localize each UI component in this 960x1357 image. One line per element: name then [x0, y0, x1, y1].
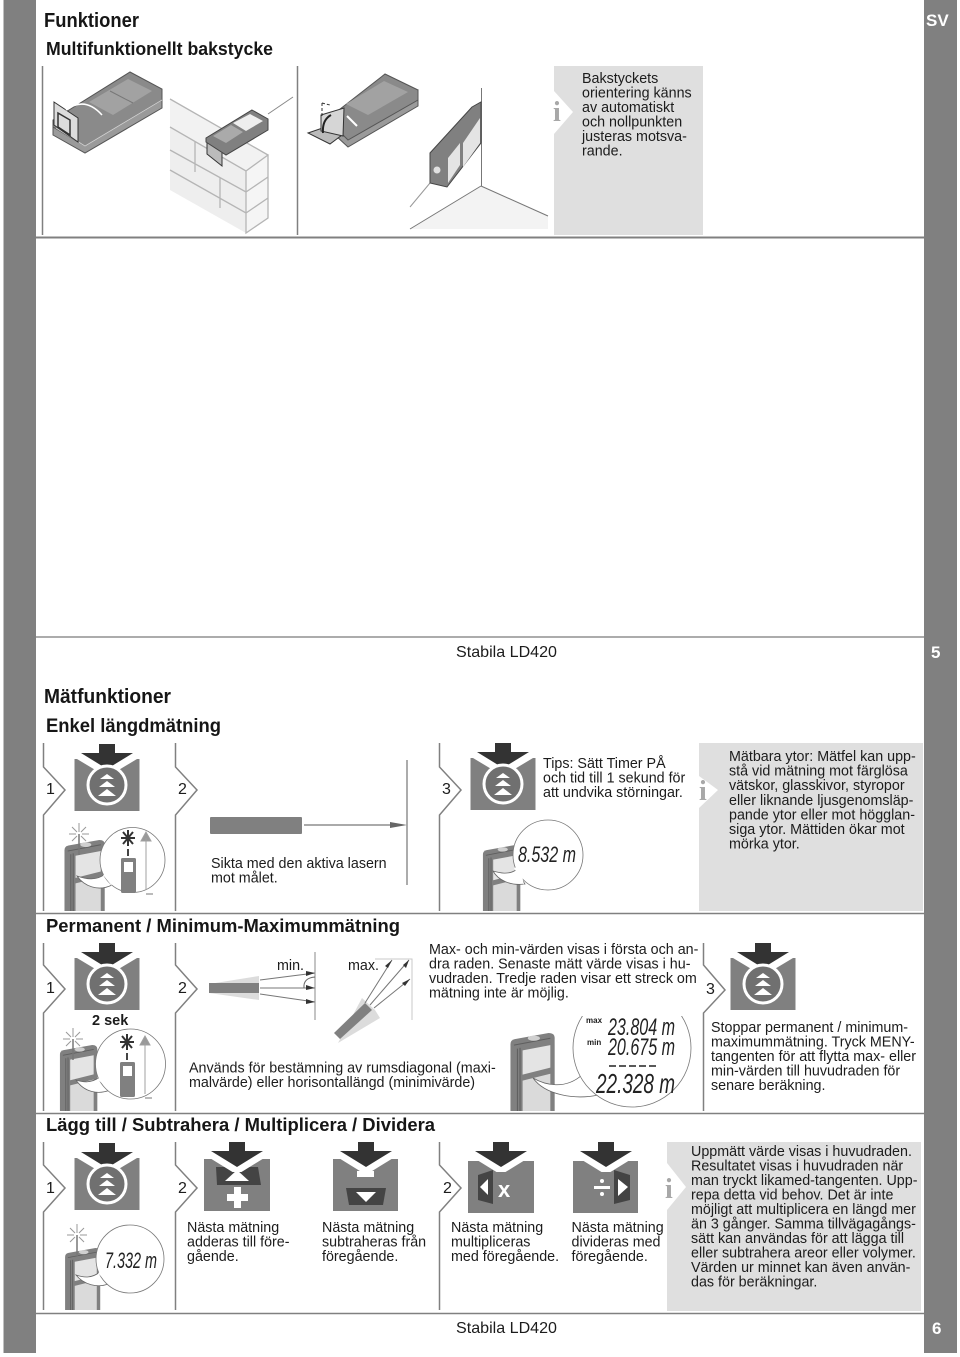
panel: add subtract multiply divide [44, 1142, 664, 1310]
text: orientation note: justeras motsva- [581, 129, 687, 145]
step tab 1 [44, 743, 65, 911]
icon: info: i [699, 776, 707, 807]
text: surfaces note: Mätbara ytor: Mätfel kan upp- [729, 749, 916, 765]
label: 2 sek: 2 sek [92, 1013, 129, 1029]
text: calculation note: sätt kan användas för att lägga till [691, 1231, 904, 1247]
language tag: SV [926, 11, 949, 30]
text: calculation note: repa detta vid behov. Det är inte [691, 1188, 893, 1204]
step number 3: 3 [442, 781, 451, 798]
panel: permanent measurement [44, 942, 916, 1111]
step tab 3 [704, 943, 725, 1111]
icon: measure button [470, 743, 536, 810]
illustration: device with flipped bracket [53, 72, 162, 153]
label: min: min [587, 1038, 601, 1047]
heading: Lägg till / Subtrahera / Multiplicera / Dividera: Lägg till / Subtrahera / Multiplicera / Dividera [46, 1114, 436, 1135]
step number 1: 1 [46, 980, 55, 997]
text: subtract: subtraheras från [322, 1234, 426, 1250]
text: surfaces note: eller liknande ljusgenomsläp- [729, 793, 914, 809]
text: stop note: senare beräkning. [711, 1078, 825, 1094]
step tab 2 multiply [440, 1142, 461, 1310]
display value: 7.332 m [105, 1248, 157, 1273]
step number 1: 1 [46, 781, 55, 798]
panel: simple length measurement [44, 743, 685, 911]
illustration: device with result [65, 1224, 164, 1310]
text: surfaces note: stå vid mätning mot färglösa [729, 764, 908, 780]
text: calculation note: Värden ur minnet kan även använ- [691, 1260, 911, 1276]
text: multiply: multipliceras [451, 1234, 530, 1250]
step number 2: 2 [178, 781, 187, 798]
text: orientation note: orientering känns [582, 86, 692, 102]
text: multiply: med föregående. [451, 1249, 559, 1265]
text: divide: divideras med [572, 1234, 661, 1250]
icon: minus button [333, 1142, 398, 1211]
icon: plus button [204, 1142, 270, 1211]
text: aim: mot målet. [211, 870, 278, 886]
multiply sign: x [498, 1177, 511, 1202]
label: min.: min. [277, 958, 304, 974]
illustration: device on brick wall [170, 97, 293, 233]
left side bar [4, 0, 36, 1353]
step tab 1 [44, 1142, 65, 1310]
page number 5: 5 [931, 643, 940, 662]
text: calculation note: das för beräkningar. [691, 1274, 817, 1290]
text: calculation note: än 3 gånger. Samma tillvägagångs- [691, 1216, 916, 1232]
text: subtract: Nästa mätning [322, 1220, 414, 1236]
text: calculation note: man tryckt likamed-tangenten. Upp- [691, 1173, 918, 1189]
icon: info: i [665, 1174, 673, 1205]
icon: measure button [730, 943, 796, 1010]
text: calculation note: Resultatet visas i huvudraden när [691, 1158, 903, 1174]
text: usage: Används för bestämning av rumsdiagonal (maxi- [189, 1060, 496, 1076]
step number 3: 3 [706, 981, 715, 998]
title: Funktioner: Funktioner [44, 10, 139, 32]
footer: page 6 model: Stabila LD420 [456, 1320, 557, 1337]
text: calculation note: eller subtrahera areor eller volymer. [691, 1246, 916, 1262]
illustration: device with max and min values [510, 1016, 692, 1111]
heading: Mätfunktioner: Mätfunktioner [44, 686, 171, 708]
info box: measurable surfaces [699, 743, 923, 911]
text: orientation note: rande. [582, 144, 623, 160]
step tab 1 [44, 943, 65, 1111]
text: add: gående. [187, 1249, 239, 1265]
step number 2: 2 [178, 1180, 187, 1197]
step tab 2 [176, 943, 197, 1111]
text: calculation note: möjligt att multiplicera en längd mer [691, 1202, 916, 1218]
right side bar [924, 0, 957, 1353]
display value min: 20.675 m [607, 1034, 675, 1061]
text: tip: att undvika störningar. [543, 785, 683, 801]
text: surfaces note: mörka ytor. [729, 837, 800, 853]
text: usage: malvärde) eller horisontallängd (minimivärde) [189, 1075, 475, 1091]
page number 6: 6 [932, 1319, 941, 1338]
text: aim: Sikta med den aktiva lasern [211, 856, 387, 872]
illustration: laser aimed at target [210, 760, 407, 885]
text: multiply: Nästa mätning [451, 1220, 543, 1236]
text: calculation note: Uppmätt värde visas i huvudraden. [691, 1144, 912, 1160]
text: subtract: föregående. [322, 1249, 398, 1265]
icon: divide button [573, 1142, 638, 1213]
heading: Enkel längdmätning: Enkel längdmätning [46, 716, 221, 737]
text: max and min display: dra raden. Senaste mätt värde visas i hu- [429, 956, 691, 972]
label: max: max [586, 1016, 603, 1025]
footer: page 5 model: Stabila LD420 [456, 644, 557, 661]
step number 2: 2 [178, 980, 187, 997]
text: stop note: maximummätning. Tryck MENY- [711, 1034, 915, 1050]
text: orientation note: och nollpunkten [582, 114, 682, 130]
text: stop note: min-värden till huvudraden för [711, 1064, 900, 1080]
step tab 2 [176, 1142, 197, 1310]
text: surfaces note: pande ytor eller mot högglan- [729, 807, 915, 823]
illustration: device with result [483, 820, 583, 911]
text: divide: föregående. [572, 1249, 648, 1265]
step tab 3 [440, 743, 461, 911]
heading: Permanent / Minimum-Maximummätning: Permanent / Minimum-Maximummätning [46, 915, 400, 936]
heading: Multifunktionellt bakstycke: Multifunktionellt bakstycke [46, 38, 273, 59]
text: tip: Tips: Sätt Timer PÅ [543, 755, 666, 772]
icon: measure button [74, 744, 140, 811]
text: max and min display: vudraden. Tredje raden visar ett streck om [429, 971, 697, 987]
text: stop note: tangenten för att flytta max- eller [711, 1049, 916, 1065]
display value: 8.532 m [518, 842, 576, 867]
text: max and min display: Max- och min-värden visas i första och an- [429, 942, 699, 958]
display value max: 23.804 m [607, 1014, 675, 1041]
info box: calculation [665, 1142, 921, 1311]
step number 1: 1 [46, 1180, 55, 1197]
step tab 2 [176, 743, 197, 911]
display value main: 22.328 m [595, 1068, 675, 1099]
illustration: device with laser on [60, 1028, 166, 1111]
icon: info: i [553, 97, 561, 128]
text: max and min display: mätning inte är möjlig. [429, 986, 569, 1002]
panel: back piece illustrations [42, 66, 548, 235]
label: max.: max. [348, 958, 379, 974]
text: divide: Nästa mätning [572, 1220, 664, 1236]
text: add: adderas till före- [187, 1234, 290, 1250]
diagram: maximum [334, 958, 412, 1043]
illustration: device in wall corner [410, 88, 548, 229]
text: surfaces note: siga ytor. Mättiden ökar mot [729, 822, 905, 838]
illustration: device with folding bracket [308, 74, 418, 147]
text: add: Nästa mätning [187, 1220, 279, 1236]
icon: measure button [74, 943, 140, 1010]
icon: measure button [74, 1143, 140, 1210]
text: orientation note: av automatiskt [582, 100, 674, 116]
text: tip: och tid till 1 sekund för [543, 770, 685, 786]
illustration: device with laser on [64, 823, 165, 911]
step number 2: 2 [443, 1180, 452, 1197]
text: stop note: Stoppar permanent / minimum- [711, 1020, 908, 1036]
info box: orientation [553, 66, 703, 235]
icon: multiply button [468, 1142, 534, 1213]
text: orientation note: Bakstyckets [582, 71, 658, 87]
text: surfaces note: vätskor, glasskivor, styropor [729, 778, 905, 794]
diagram: minimum [209, 952, 315, 1020]
